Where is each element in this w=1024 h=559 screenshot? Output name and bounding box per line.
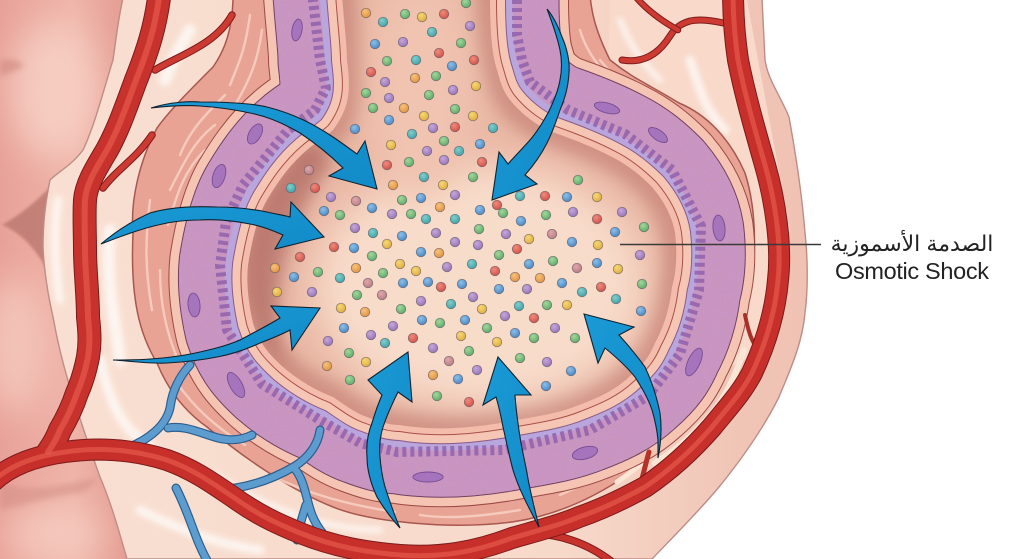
callout: leader line <box>620 244 821 246</box>
artery: branches <box>103 0 760 482</box>
fat strips: pale band inside lower right artery <box>617 350 744 482</box>
panel: lumen interior <box>247 0 676 428</box>
arrow: mid left <box>101 202 324 249</box>
arrow: bottom right <box>584 314 661 458</box>
label: Arabic term: الصدمة الأسموزية <box>831 230 993 256</box>
panel: neighbouring intestinal loops <box>0 0 135 559</box>
artery: main red vessels <box>0 0 779 559</box>
arrow: top right <box>492 9 569 200</box>
vein: blue vessels <box>122 365 338 559</box>
panel: muscle layer <box>132 0 754 525</box>
panel: outer fat layer silhouette <box>43 0 807 559</box>
villi: epithelial cell row <box>220 0 701 452</box>
nuclei: large cells in mucosa <box>187 18 726 482</box>
label: English term: Osmotic Shock <box>835 258 989 284</box>
particles: solute dots in lumen <box>270 0 649 407</box>
arrow: lower left <box>113 306 320 363</box>
arrow: bottom centre-left <box>367 352 412 528</box>
panel: mucosa wall rings <box>247 0 676 428</box>
artery: left trunk and great arch <box>0 0 779 559</box>
arrow: bottom centre <box>483 357 539 527</box>
arrow: top left <box>151 102 377 189</box>
arrows: blue inward water flow <box>101 9 661 528</box>
